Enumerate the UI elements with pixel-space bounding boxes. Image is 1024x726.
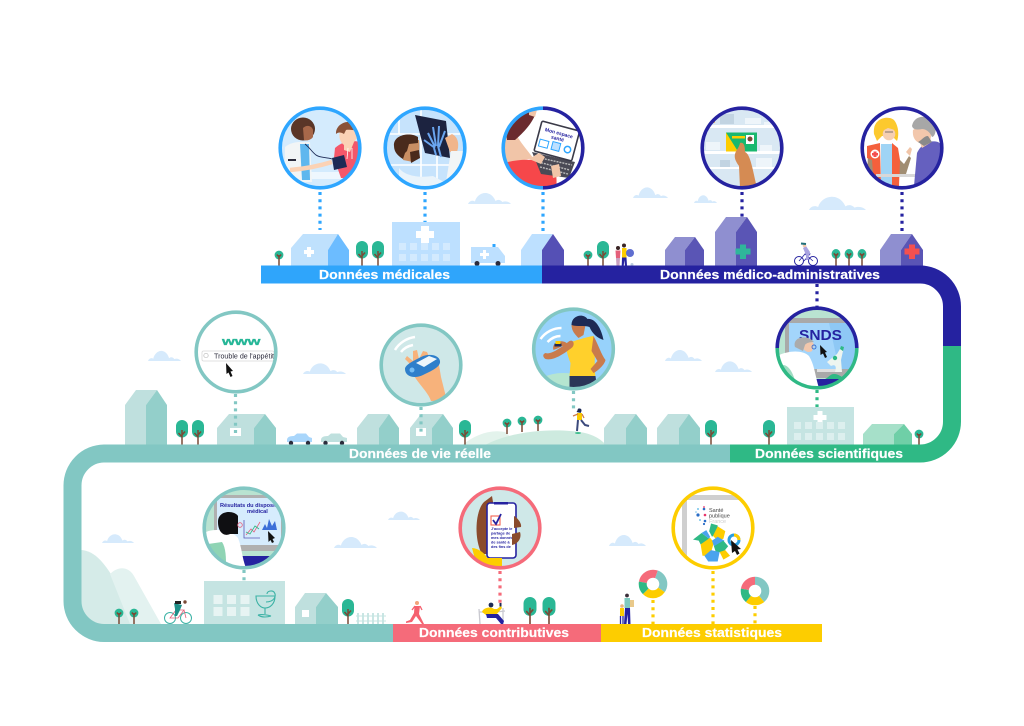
circle: SNDS scientist: SNDS	[799, 327, 842, 344]
circle: consent phone	[458, 486, 542, 570]
road: scientific	[729, 346, 952, 454]
cars	[287, 434, 347, 445]
buildings: medical	[291, 222, 564, 266]
circle: public health map: Santé	[709, 508, 723, 514]
ambulance	[471, 244, 505, 266]
label: Données statistiques: Données statistiques	[642, 625, 782, 640]
circle: x-ray	[383, 106, 467, 190]
circle: health card	[700, 106, 784, 190]
circle: medical device results: médical	[247, 509, 268, 515]
road	[72, 274, 952, 633]
pharmacy building	[204, 581, 285, 624]
circle: doctor and patient	[278, 106, 362, 190]
circle: medical device results: Résultats du dispositif	[220, 503, 280, 509]
circle: Mon espace santé: santé	[550, 134, 565, 144]
people with box	[620, 594, 634, 624]
house half blue half navy	[521, 234, 564, 266]
runner: pink	[406, 601, 424, 624]
circle: consent phone: J'accepte le	[491, 527, 512, 531]
road: medico-administrative	[542, 274, 952, 347]
road: real life	[72, 454, 730, 633]
runner: yellow	[573, 408, 589, 434]
hospital	[392, 222, 460, 266]
circle: Mon espace santé	[501, 106, 585, 190]
house with red cross	[880, 234, 923, 266]
donut chart right	[745, 581, 765, 601]
buildings: scientific	[787, 407, 912, 445]
hospital	[787, 407, 854, 445]
label: Données médico-administratives: Données médico-administratives	[660, 267, 880, 282]
house with cross	[291, 234, 349, 266]
label: Données scientifiques: Données scientifiques	[755, 446, 903, 461]
circle: consent phone: partage de	[491, 532, 510, 536]
circle: consent phone: mes données	[491, 536, 515, 540]
road: medical	[261, 266, 543, 284]
dotted connectors	[244, 192, 902, 624]
circle: search engine	[194, 310, 278, 394]
house	[665, 237, 704, 266]
house near pharmacy	[295, 593, 338, 624]
trees	[115, 241, 923, 624]
circle: Mon espace santé: Mon espace	[544, 127, 574, 140]
circle: public health map	[671, 486, 755, 570]
road: contributive	[393, 624, 602, 642]
circle: SNDS scientist	[775, 306, 859, 390]
label: Données contributives: Données contributives	[419, 625, 569, 640]
donut chart left	[643, 574, 663, 594]
label: Données de vie réelle: Données de vie réelle	[349, 446, 491, 461]
circle: search engine: Trouble de l'appétit	[214, 354, 274, 360]
tall house with green cross	[715, 217, 757, 266]
circle: search engine: www	[221, 335, 261, 347]
circle: consent phone: des fins de	[491, 545, 511, 549]
circle: Red Cross volunteer	[860, 106, 944, 190]
hill: real-life row	[462, 430, 606, 445]
cyclist	[794, 244, 818, 266]
circle: glucose sensor hand	[379, 323, 463, 407]
dotted connectors over houses	[236, 394, 421, 434]
real-life buildings	[125, 390, 700, 445]
person on bench with phone	[479, 603, 505, 624]
clouds	[102, 187, 866, 548]
road: statistics	[601, 624, 822, 642]
label: Données médicales: Données médicales	[319, 267, 450, 282]
icon: bowl of Hygieia	[256, 591, 275, 617]
circle: connected watch	[532, 307, 616, 391]
circle: public health map: France	[709, 519, 726, 525]
fence	[356, 613, 386, 624]
buildings: medico-administrative	[665, 217, 923, 266]
circle: medical device results	[202, 486, 286, 570]
hills: bottom left	[80, 550, 161, 624]
people with stroller	[616, 244, 634, 266]
green house	[863, 424, 912, 445]
circle: public health map: publique	[709, 514, 730, 520]
cyclist: teal	[164, 600, 192, 624]
circle: consent phone: de santé à	[491, 540, 510, 544]
